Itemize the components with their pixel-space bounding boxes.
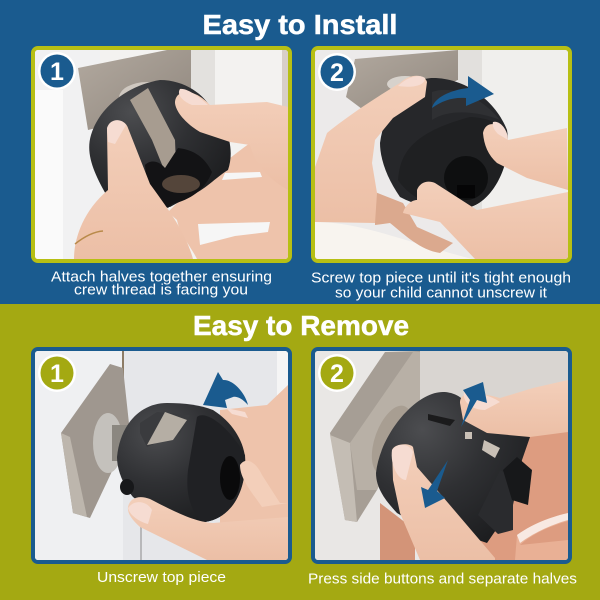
arrow: rotate clockwise xyxy=(432,76,494,108)
panel: install step 2 xyxy=(313,48,570,261)
caption: install step 2: Screw top piece until it's tight enough xyxy=(311,270,571,286)
caption: remove step 1: Unscrew top piece xyxy=(97,569,226,586)
step badge 1: 1 xyxy=(50,58,64,86)
arrow: pull halves apart up xyxy=(461,382,487,427)
arrow: pull halves apart down xyxy=(421,460,448,508)
step badge 2: 2 xyxy=(330,360,344,388)
blue section background xyxy=(0,0,600,304)
step badge 2: 2 xyxy=(330,59,344,87)
panel: install step 1 xyxy=(33,48,290,261)
heading: Easy to Remove: Easy to Remove xyxy=(193,310,409,341)
photo: screwing top piece xyxy=(315,50,568,259)
heading: Easy to Install: Easy to Install xyxy=(202,9,398,40)
step badge 1: 1 xyxy=(50,360,64,388)
lower fingers xyxy=(168,143,288,259)
panel frame xyxy=(33,349,290,562)
step badge 1 xyxy=(38,52,76,90)
olive section background xyxy=(0,304,600,600)
panel: remove step 2 xyxy=(313,349,570,562)
panel frame xyxy=(33,48,290,261)
photo: unscrewing top piece xyxy=(35,351,288,560)
step badge 2 xyxy=(318,53,356,91)
step badge 1 xyxy=(38,354,76,392)
photo: attaching halves xyxy=(35,50,288,259)
hand behind xyxy=(220,385,288,525)
photo: separating halves xyxy=(315,351,568,560)
caption: remove step 2: Press side buttons and separate halves xyxy=(308,570,577,588)
step badge 2 xyxy=(318,354,356,392)
panel: remove step 1 xyxy=(33,349,290,562)
arrow: unscrew counterclockwise xyxy=(203,372,248,408)
caption: install step 2: so your child cannot unscrew it xyxy=(335,284,548,302)
caption: install step 1: crew thread is facing you xyxy=(74,282,248,298)
panel frame xyxy=(313,48,570,261)
panel frame xyxy=(313,349,570,562)
caption: install step 1: Attach halves together ensuring xyxy=(51,268,272,286)
